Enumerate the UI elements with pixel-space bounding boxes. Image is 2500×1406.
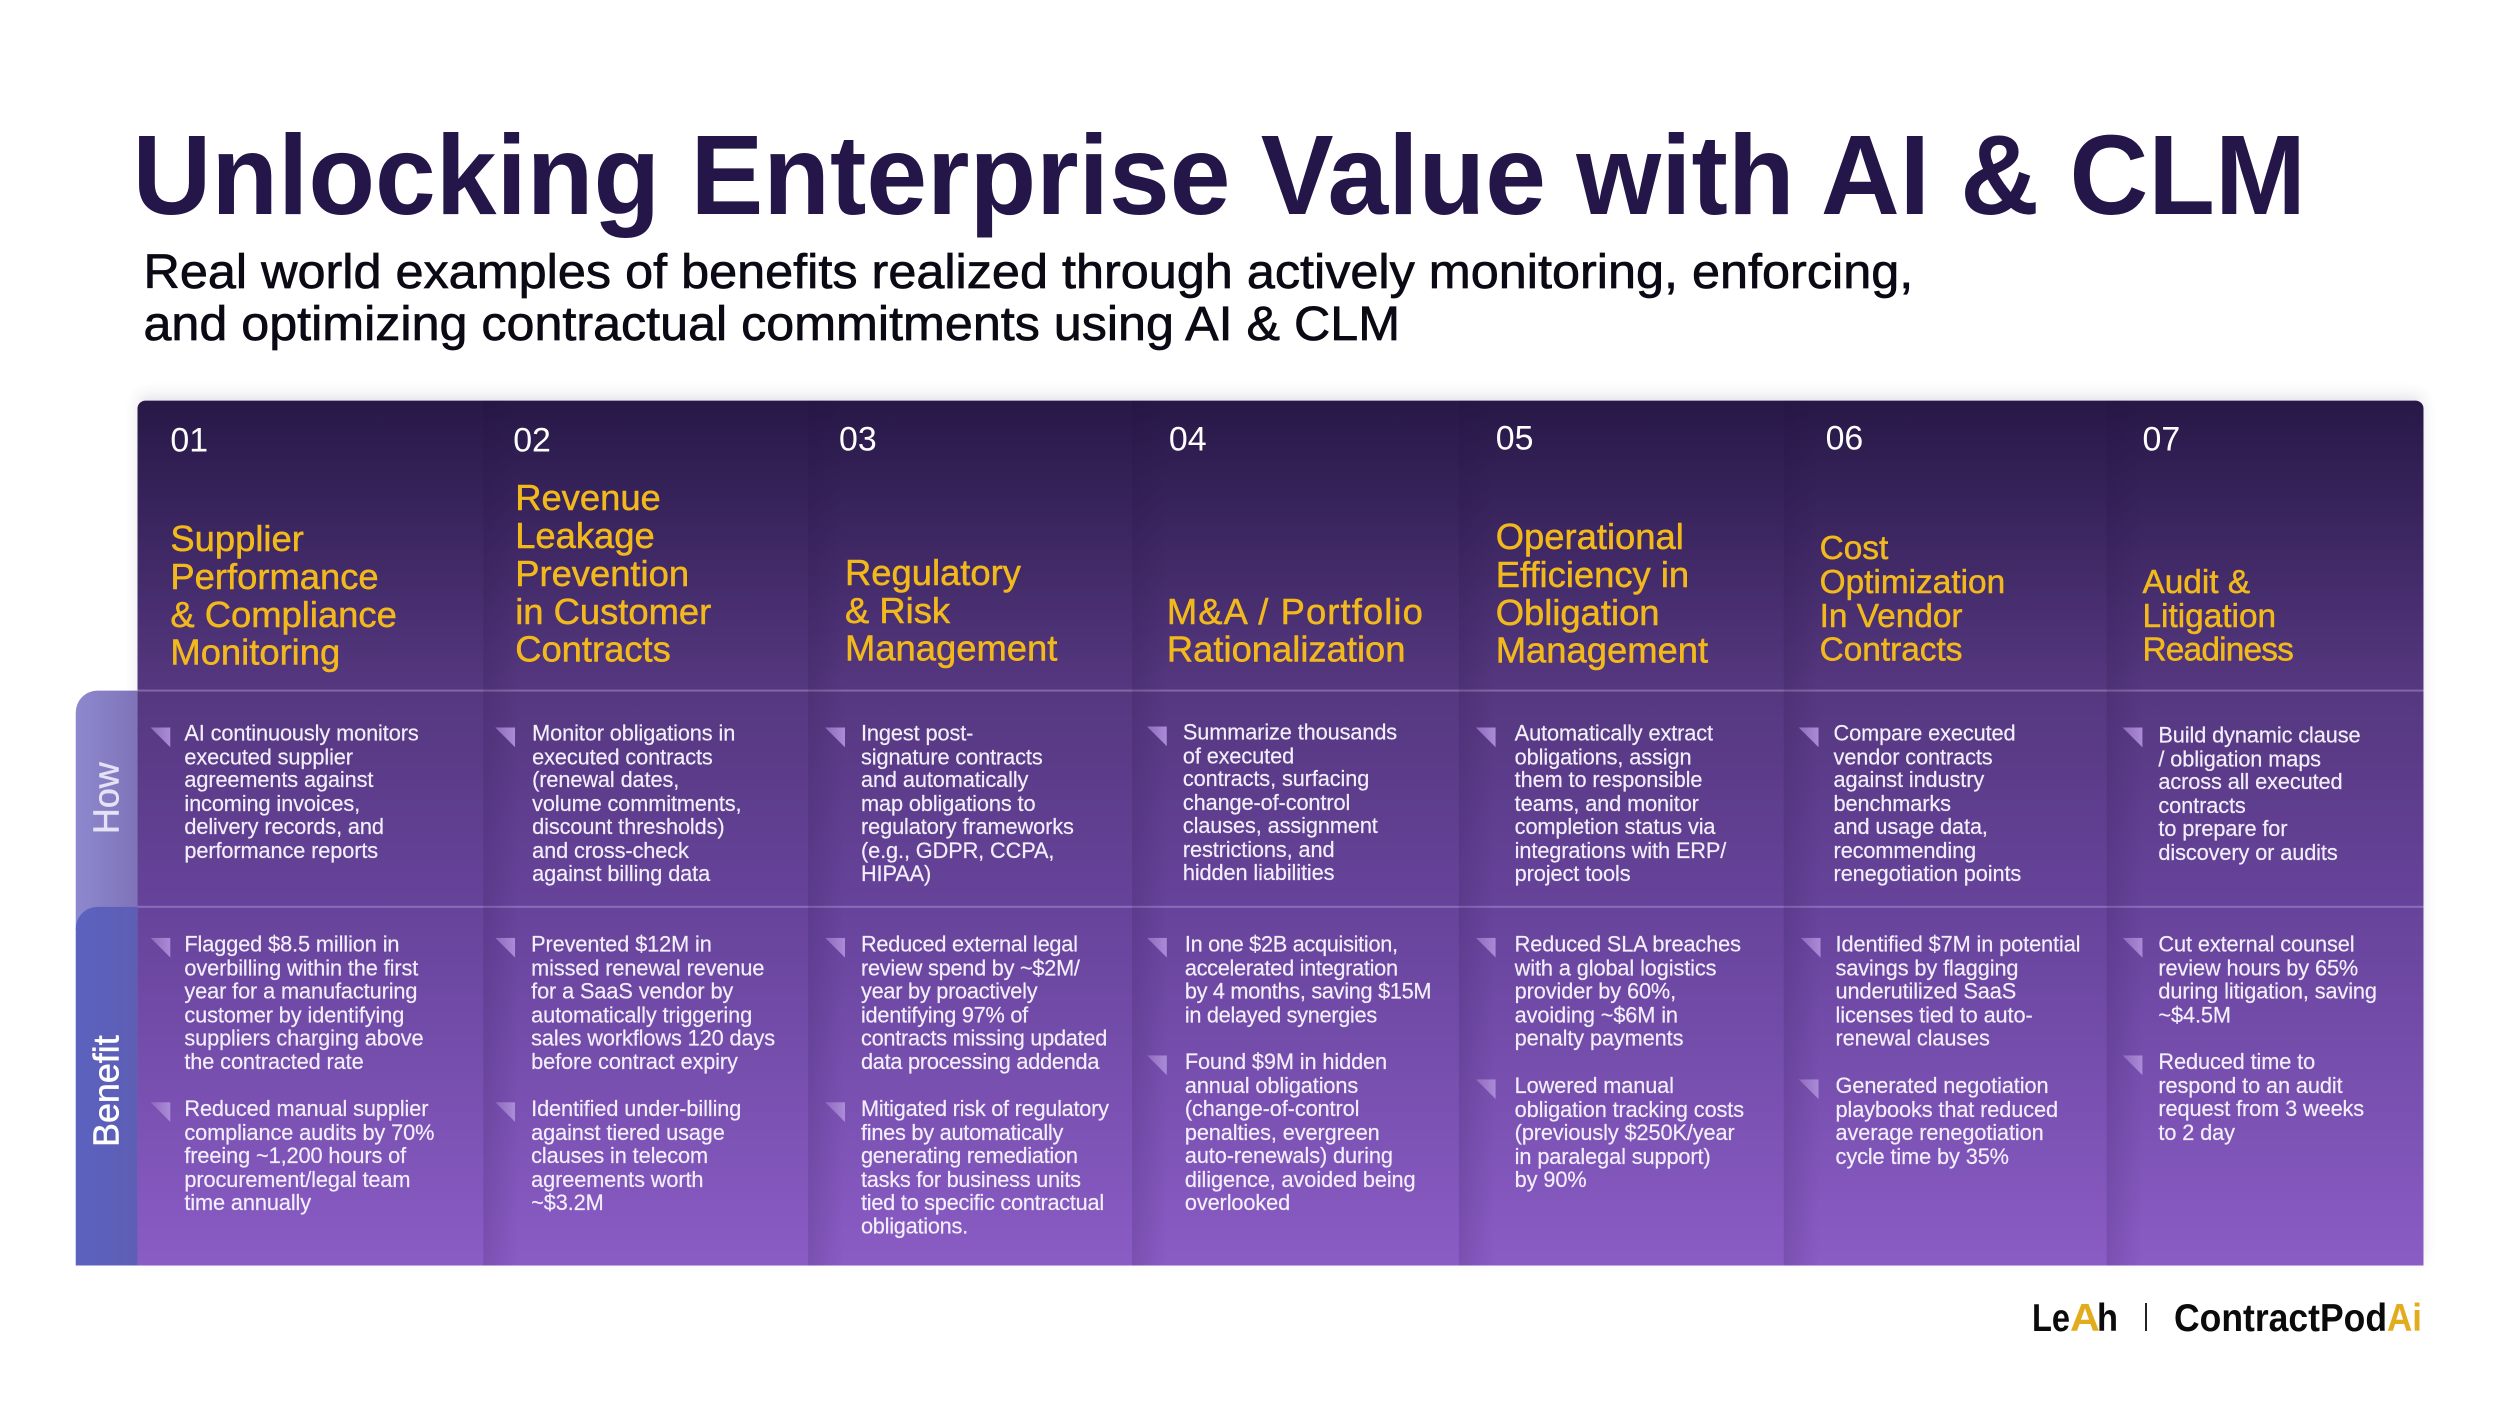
benefit text 2	[184, 1096, 434, 1215]
logo: ContractPodAi: ContractPod	[2174, 1297, 2387, 1340]
logo: LeAh: h	[2097, 1297, 2118, 1340]
benefit text 2: (previously $250K/year	[1515, 1120, 1735, 1145]
number 06: 06	[1826, 420, 1863, 457]
benefit text 2: against tiered usage	[531, 1120, 725, 1144]
benefit text 2: Generated negotiation	[1836, 1073, 2048, 1098]
logos	[2032, 1297, 2422, 1340]
benefit text 1: review spend by ~$2M/	[861, 955, 1080, 980]
benefit text 2: respond to an audit	[2158, 1073, 2343, 1098]
how text: them to responsible	[1515, 767, 1702, 792]
how text: completion status via	[1515, 814, 1715, 839]
benefit text 2: average renegotiation	[1836, 1120, 2044, 1145]
benefit bullet icon 2	[150, 1102, 170, 1122]
how text: renegotiation points	[1834, 861, 2021, 886]
panel: column 07	[2106, 421, 2377, 1266]
how text: vendor contracts	[1834, 744, 1993, 769]
heading 01: Performance	[170, 556, 379, 597]
benefit text 1: Identified $7M in potential	[1836, 932, 2080, 957]
benefit text 2: obligation tracking costs	[1515, 1097, 1744, 1122]
panel: column 01	[150, 422, 434, 1215]
benefit text 2: to 2 day	[2158, 1120, 2235, 1144]
how text: AI continuously monitors	[184, 720, 419, 745]
heading 01: Monitoring	[170, 632, 340, 673]
heading 03: Regulatory	[845, 552, 1021, 593]
how text: to prepare for	[2158, 816, 2287, 841]
heading 07	[2142, 564, 2293, 669]
benefit text 1: overbilling within the first	[184, 955, 418, 980]
subtitle: and optimizing contractual commitments using AI & CLM	[143, 298, 1400, 351]
benefit text 1: licenses tied to auto-	[1836, 1002, 2033, 1027]
how text: teams, and monitor	[1515, 791, 1699, 816]
benefit text 2: auto-renewals) during	[1185, 1143, 1393, 1168]
benefit text 2: in paralegal support)	[1515, 1143, 1711, 1168]
heading 04: Rationalization	[1167, 629, 1406, 670]
logo: LeAh	[2032, 1297, 2118, 1340]
heading 05: Efficiency in	[1496, 554, 1689, 595]
how text: restrictions, and	[1183, 837, 1334, 861]
heading 03: Management	[845, 628, 1057, 669]
how text: delivery records, and	[184, 814, 384, 839]
heading 06: Contracts	[1820, 632, 1962, 669]
how text: (e.g., GDPR, CCPA,	[861, 838, 1054, 862]
benefit bullet icon 2	[1476, 1079, 1496, 1099]
number 07: 07	[2142, 421, 2180, 458]
how text: project tools	[1515, 861, 1631, 886]
benefit bullet icon 1	[1147, 938, 1167, 958]
benefit text 2	[2158, 1049, 2364, 1145]
benefit text 2: freeing ~1,200 hours of	[184, 1143, 406, 1168]
benefit text 1: in delayed synergies	[1185, 1002, 1377, 1027]
benefit text 2: obligations.	[861, 1213, 968, 1238]
benefit text 1: missed renewal revenue	[531, 955, 764, 980]
benefit text 2: Reduced manual supplier	[184, 1096, 428, 1121]
benefit text 1: during litigation, saving	[2158, 979, 2377, 1003]
benefit text 1: contracts missing updated	[861, 1025, 1107, 1050]
heading 05	[1496, 516, 1708, 671]
benefit text 1	[184, 932, 423, 1074]
heading 05: Obligation	[1496, 592, 1660, 633]
table background	[138, 401, 2423, 1266]
label: How: How	[86, 762, 127, 834]
benefit text 2: annual obligations	[1185, 1073, 1358, 1098]
benefit text 1: In one $2B acquisition,	[1185, 932, 1398, 957]
benefit text 1: sales workflows 120 days	[531, 1025, 775, 1050]
how text: regulatory frameworks	[861, 814, 1074, 839]
how text: and automatically	[861, 767, 1028, 792]
benefit text 2: playbooks that reduced	[1836, 1097, 2058, 1122]
how text: executed supplier	[184, 744, 353, 769]
how text: recommending	[1834, 838, 1976, 862]
benefit text 2	[1185, 1049, 1416, 1215]
how text: volume commitments,	[532, 791, 741, 816]
how text: Build dynamic clause	[2158, 722, 2360, 747]
benefit text 1: identifying 97% of	[861, 1002, 1028, 1027]
benefit text 1: for a SaaS vendor by	[531, 979, 733, 1003]
how text	[861, 720, 1074, 886]
heading 07: Litigation	[2142, 598, 2276, 635]
benefit bullet icon 1	[150, 938, 170, 958]
how text: signature contracts	[861, 744, 1043, 769]
benefit bullet icon 2	[1799, 1079, 1819, 1099]
heading 04: M&A / Portfolio	[1167, 591, 1424, 632]
benefit text 1: avoiding ~$6M in	[1515, 1002, 1678, 1027]
benefit bullet icon 2	[825, 1102, 845, 1122]
benefit text 2	[861, 1096, 1109, 1238]
benefit text 1	[1514, 932, 1741, 1050]
benefit text 2: fines by automatically	[861, 1120, 1063, 1144]
how text: against billing data	[532, 861, 710, 886]
benefit text 2: Mitigated risk of regulatory	[861, 1096, 1109, 1121]
heading 03	[845, 552, 1058, 669]
how text: Automatically extract	[1515, 720, 1713, 745]
how text	[1183, 719, 1397, 885]
how text: discovery or audits	[2158, 840, 2338, 864]
benefit text 2: Reduced time to	[2158, 1049, 2315, 1074]
how text: HIPAA)	[861, 861, 931, 886]
logo divider	[2145, 1303, 2147, 1331]
benefit text 1	[2158, 932, 2377, 1027]
subtitle: Real world examples of benefits realized through actively monitoring, enforcing,	[143, 246, 1913, 299]
heading 01: Supplier	[170, 518, 304, 559]
number 02: 02	[513, 422, 551, 459]
benefit text 1: the contracted rate	[184, 1049, 364, 1074]
how text: and cross-check	[532, 838, 689, 862]
benefit text 1: year by proactively	[861, 979, 1037, 1003]
how text: performance reports	[184, 838, 378, 862]
benefit text 1: suppliers charging above	[184, 1025, 423, 1050]
benefit text 2: tasks for business units	[861, 1166, 1081, 1191]
row tab: Benefit	[76, 907, 138, 1266]
panel: column 05	[1459, 420, 1744, 1266]
benefit text 1: provider by 60%,	[1515, 979, 1676, 1003]
benefit text 2: procurement/legal team	[184, 1166, 410, 1191]
benefit text 2: overlooked	[1185, 1190, 1290, 1215]
benefit text 2: cycle time by 35%	[1836, 1143, 2009, 1168]
benefit text 1	[860, 932, 1107, 1074]
benefit text 1: accelerated integration	[1185, 955, 1398, 980]
how text	[532, 720, 741, 886]
benefit text 1: by 4 months, saving $15M	[1185, 979, 1431, 1003]
benefit text 1: year for a manufacturing	[184, 979, 417, 1003]
how bullet icon	[495, 727, 515, 747]
how text: contracts, surfacing	[1183, 766, 1369, 791]
benefit bullet icon 1	[1476, 938, 1496, 958]
benefit text 2: Identified under-billing	[531, 1096, 741, 1121]
benefit text 1: review hours by 65%	[2158, 955, 2358, 980]
number 04: 04	[1169, 421, 1207, 458]
benefit text 1: customer by identifying	[184, 1002, 404, 1027]
how text: executed contracts	[532, 744, 713, 769]
benefit text 2: by 90%	[1515, 1167, 1587, 1192]
benefit text 2: penalties, evergreen	[1185, 1120, 1380, 1144]
how text: Ingest post-	[861, 720, 973, 745]
heading 02	[515, 477, 711, 670]
benefit bullet icon 2	[2123, 1055, 2142, 1075]
logo: ContractPodAi: Ai	[2387, 1297, 2422, 1340]
how text: Monitor obligations in	[532, 720, 735, 745]
benefit text 2: compliance audits by 70%	[184, 1120, 434, 1144]
subtitle	[143, 246, 1913, 351]
how text: across all executed	[2158, 769, 2342, 794]
number 03: 03	[839, 421, 877, 458]
heading 02: Contracts	[515, 629, 671, 670]
benefit text 2	[1836, 1073, 2058, 1169]
heading 07: Readiness	[2142, 632, 2293, 669]
benefit bullet icon 1	[1801, 938, 1821, 958]
heading 02: Leakage	[515, 515, 655, 556]
benefit text 2: time annually	[184, 1190, 311, 1215]
benefit text 1	[1185, 932, 1431, 1028]
benefit text 1: ~$4.5M	[2158, 1002, 2231, 1027]
benefit text 2: ~$3.2M	[531, 1190, 604, 1215]
benefit text 2: generating remediation	[861, 1143, 1078, 1168]
how text: benchmarks	[1834, 791, 1951, 816]
benefit text 1	[1836, 932, 2080, 1050]
benefit text 2: agreements worth	[531, 1166, 703, 1191]
number 05: 05	[1496, 420, 1533, 457]
heading 06: Cost	[1820, 530, 1888, 567]
how bullet icon	[1476, 727, 1496, 747]
how text: hidden liabilities	[1183, 860, 1334, 885]
how text: incoming invoices,	[184, 791, 360, 816]
heading 07: Audit &	[2142, 564, 2250, 601]
heading 01	[170, 518, 397, 673]
benefit text 1: penalty payments	[1515, 1025, 1683, 1050]
title: Unlocking Enterprise Value with AI & CLM	[133, 112, 2306, 239]
how text: against industry	[1834, 767, 1984, 792]
number 01: 01	[170, 422, 208, 459]
panel: column 03	[808, 421, 1109, 1266]
benefit text 1: automatically triggering	[531, 1002, 752, 1027]
logo: LeAh: Le	[2032, 1297, 2070, 1340]
benefit text 1: savings by flagging	[1836, 955, 2018, 980]
benefit text 2	[531, 1096, 741, 1215]
benefit text 2	[1515, 1073, 1744, 1192]
benefit text 2: Lowered manual	[1515, 1073, 1674, 1098]
heading 02: Prevention	[515, 553, 689, 594]
benefit text 1: underutilized SaaS	[1836, 979, 2016, 1003]
how bullet icon	[150, 727, 170, 747]
benefit text 2: request from 3 weeks	[2158, 1096, 2364, 1121]
heading 05: Operational	[1496, 516, 1684, 557]
heading 02: in Customer	[515, 591, 711, 632]
how text: of executed	[1183, 743, 1294, 768]
benefit text 2: clauses in telecom	[531, 1143, 708, 1168]
heading 04	[1167, 591, 1424, 670]
how text: Compare executed	[1834, 720, 2015, 745]
heading 06: In Vendor	[1820, 598, 1963, 635]
heading 06: Optimization	[1820, 564, 2005, 601]
how text: obligations, assign	[1515, 744, 1691, 769]
how text: integrations with ERP/	[1515, 838, 1726, 862]
how text: contracts	[2158, 793, 2246, 818]
benefit text 2: tied to specific contractual	[861, 1190, 1104, 1215]
benefit text 1: renewal clauses	[1836, 1025, 1990, 1050]
benefit bullet icon 1	[495, 938, 515, 958]
benefit text 2: diligence, avoided being	[1185, 1166, 1416, 1191]
benefit text 1: Reduced SLA breaches	[1515, 932, 1741, 957]
benefit text 1: Cut external counsel	[2158, 932, 2354, 957]
how text: clauses, assignment	[1183, 813, 1378, 838]
how bullet icon	[2123, 727, 2142, 747]
heading 02: Revenue	[515, 477, 661, 518]
row tab: How	[76, 691, 138, 930]
how text	[1834, 720, 2021, 886]
how text: and usage data,	[1834, 814, 1988, 839]
how bullet icon	[825, 727, 845, 747]
how text: change-of-control	[1183, 790, 1350, 815]
how bullet icon	[1147, 726, 1167, 746]
benefit text 2: (change-of-control	[1185, 1096, 1359, 1121]
heading 03: & Risk	[845, 590, 950, 631]
how bullet icon	[1799, 727, 1819, 747]
heading 01: & Compliance	[170, 594, 397, 635]
heading 05: Management	[1496, 630, 1708, 671]
panel: column 06	[1784, 420, 2080, 1266]
benefit text 1: before contract expiry	[531, 1049, 738, 1074]
how text: agreements against	[184, 767, 373, 792]
how text	[1514, 720, 1726, 886]
benefit text 1: Reduced external legal	[861, 932, 1078, 957]
benefit bullet icon 1	[2123, 938, 2142, 958]
benefit text 1: data processing addenda	[861, 1049, 1099, 1074]
how text: / obligation maps	[2158, 746, 2321, 771]
benefit text 1	[531, 932, 775, 1074]
how text	[2158, 722, 2360, 865]
how text: discount thresholds)	[532, 814, 725, 839]
benefit bullet icon 2	[1147, 1055, 1167, 1075]
label: Benefit: Benefit	[86, 1035, 127, 1147]
how text: Summarize thousands	[1183, 719, 1397, 744]
panel: column 04	[1132, 421, 1431, 1266]
benefit bullet icon 1	[825, 938, 845, 958]
benefit text 1: with a global logistics	[1515, 955, 1716, 980]
how text	[184, 720, 419, 863]
how text: (renewal dates,	[532, 767, 679, 792]
benefit bullet icon 2	[495, 1102, 515, 1122]
benefit text 2: Found $9M in hidden	[1185, 1049, 1387, 1074]
heading 06	[1820, 530, 2005, 669]
benefit text 1: Prevented $12M in	[531, 932, 712, 957]
logo: LeAh: A	[2070, 1297, 2100, 1340]
benefit text 1: Flagged $8.5 million in	[184, 932, 399, 957]
how text: map obligations to	[861, 791, 1035, 816]
panel: column 02	[484, 422, 775, 1266]
